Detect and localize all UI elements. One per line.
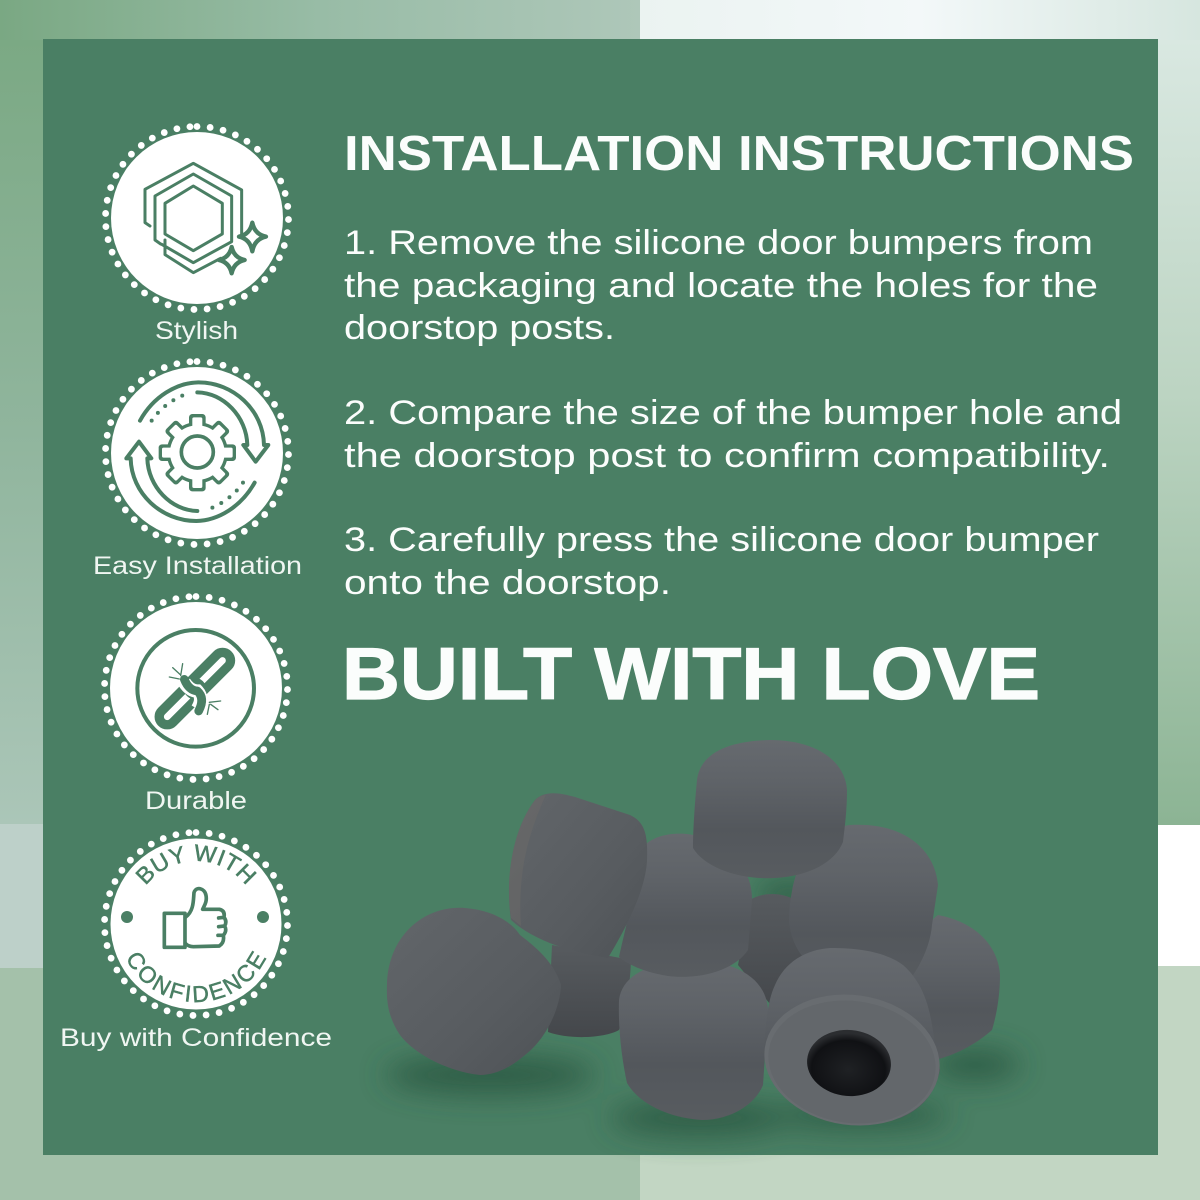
text block: step 1: the packaging and locate the holes for the bbox=[344, 267, 1098, 305]
icon: easy installation gear badge bbox=[106, 362, 288, 544]
icon: durable chain badge bbox=[104, 596, 288, 780]
text block: step 3: onto the doorstop. bbox=[344, 564, 671, 602]
text block: step 2: the doorstop post to confirm compatibility. bbox=[344, 437, 1110, 475]
text block: step 2: 2. Compare the size of the bumper hole and bbox=[344, 394, 1122, 432]
text block: step 1 bbox=[344, 224, 1098, 347]
text block: step 1: doorstop posts. bbox=[344, 309, 615, 347]
icon: buy with confidence seal: BUY WITH bbox=[135, 844, 257, 885]
label: stylish: Stylish bbox=[155, 317, 238, 345]
icon: buy with confidence seal bbox=[101, 829, 291, 1019]
text block: step 1: 1. Remove the silicone door bumpers from bbox=[344, 224, 1093, 262]
label: buy with confidence: Buy with Confidence bbox=[60, 1024, 332, 1052]
icon: buy with confidence seal: CONFIDENCE bbox=[128, 950, 266, 1002]
label: easy installation: Easy Installation bbox=[93, 552, 302, 580]
text block: step 3: 3. Carefully press the silicone door bumper bbox=[344, 521, 1099, 559]
product photo: pile of grey silicone door bumpers bbox=[385, 740, 1020, 1137]
heading: installation instructions: INSTALLATION INSTRUCTIONS bbox=[344, 127, 1134, 181]
text block: step 2 bbox=[344, 394, 1122, 475]
heading: built with love: BUILT WITH LOVE bbox=[342, 634, 1040, 715]
text block: step 3 bbox=[344, 521, 1099, 602]
icon: stylish hexagon badge bbox=[106, 126, 288, 310]
label: durable: Durable bbox=[145, 787, 247, 815]
